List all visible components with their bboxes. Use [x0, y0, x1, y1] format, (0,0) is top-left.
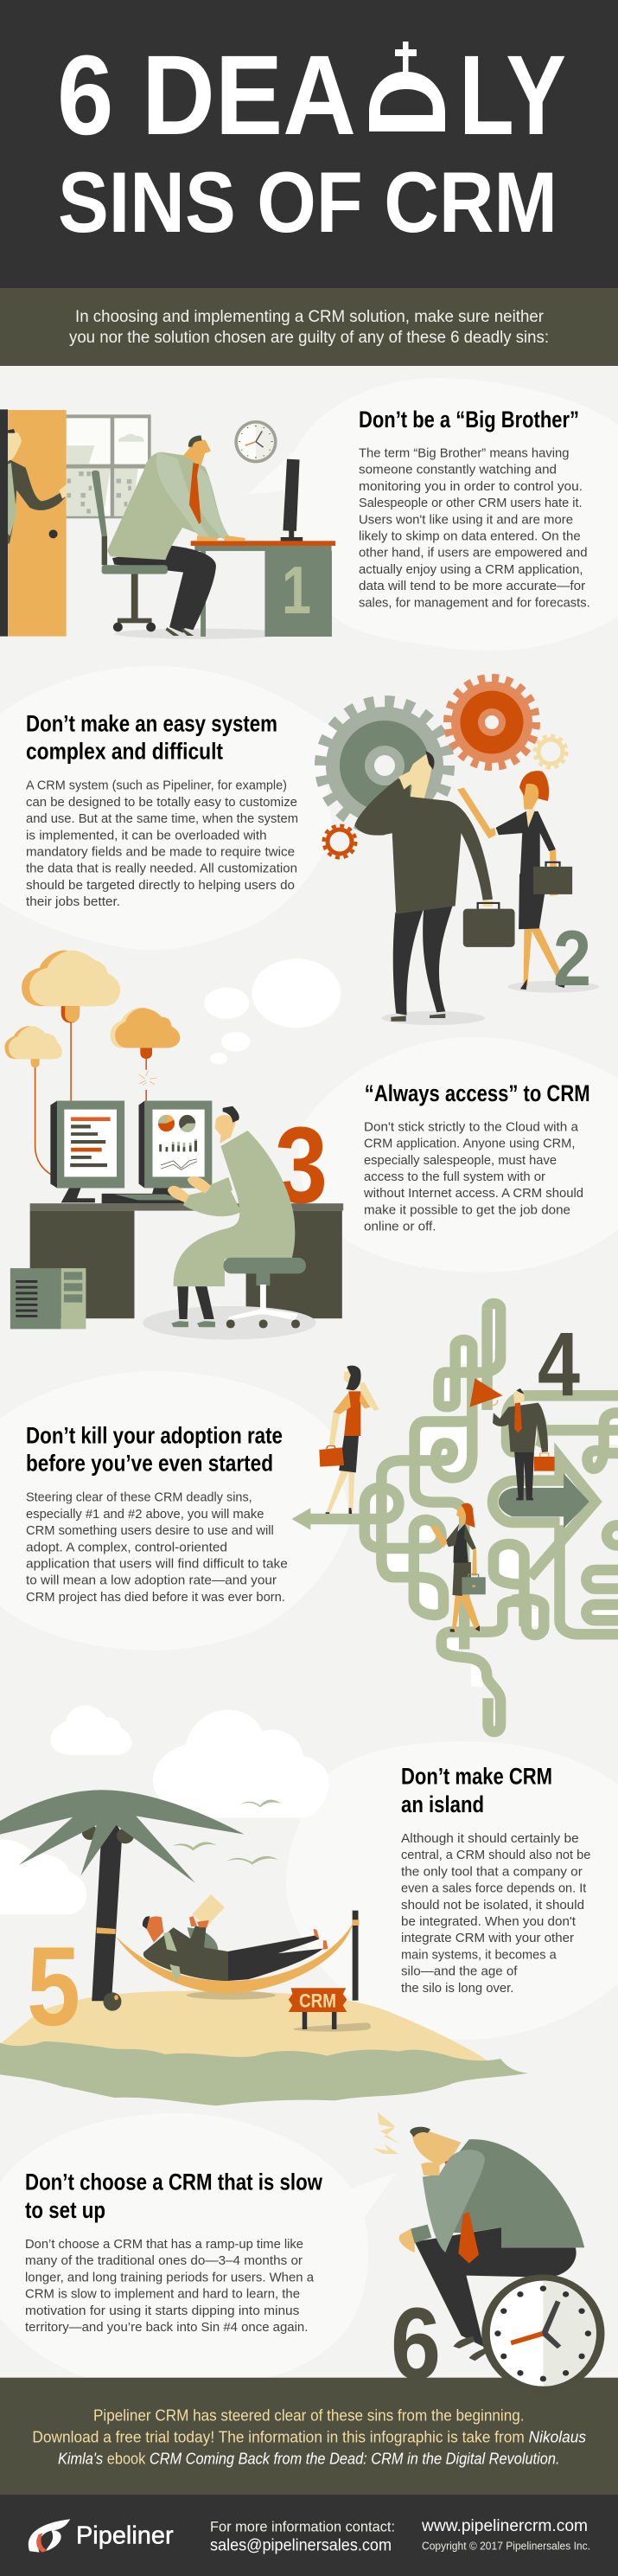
panel: sin 1 big brother: [0, 378, 618, 650]
hammock post: [353, 1911, 359, 2001]
heading 4: before you’ve even started: [26, 1451, 273, 1477]
speech blob 6: [0, 2113, 396, 2378]
body text 6: [25, 2237, 315, 2335]
cloud right: [111, 1008, 180, 1059]
intro band: In choosing and implementing a CRM solution, make sure neither: [75, 308, 545, 326]
number 6: 6: [391, 2287, 441, 2401]
seated man: [168, 1106, 295, 1327]
body text 2: mandatory fields and be made to require twice: [26, 844, 295, 860]
door with onlooker: [0, 409, 67, 637]
illustration: worried man on clock: [373, 2112, 605, 2401]
sea: [0, 2041, 528, 2105]
heading 6: to set up: [25, 2197, 105, 2223]
body text 5: the only tool that a company or: [401, 1864, 583, 1879]
desk: [30, 1203, 343, 1318]
crm sign: [289, 1988, 347, 2029]
body text 3: CRM application. Anyone using CRM,: [364, 1137, 575, 1151]
title header: [0, 0, 618, 288]
head: [412, 2129, 462, 2165]
intro band: [0, 288, 618, 366]
illustration: man and woman: [354, 751, 599, 1025]
pipes: [308, 1304, 618, 1732]
body text 3: especially salespeople, must have: [364, 1153, 557, 1168]
tie: [458, 2212, 479, 2264]
body text 3: without Internet access. A CRM should: [363, 1186, 583, 1201]
person: woman with orange bag: [319, 1366, 379, 1514]
number 2: 2: [553, 915, 591, 1003]
contact text: For more information contact:: [210, 2519, 395, 2535]
footer band: closing statement: Kimla's ebook CRM Coming Back from the Dead: CRM in the Digital Revolution.: [58, 2450, 560, 2467]
body text 3: make it possible to get the job done: [364, 1202, 570, 1217]
heading 6: Don’t choose a CRM that is slow: [25, 2169, 323, 2195]
keyboard: [102, 1194, 206, 1203]
icon: large grey gear: [321, 702, 449, 830]
arrow left: [291, 1508, 310, 1530]
panel: sin 4 adoption rate: [0, 1304, 618, 1732]
body text 2: their jobs better.: [26, 894, 120, 909]
website and copyright: www.pipelinercrm.com: [421, 2517, 588, 2535]
body text 1: [359, 446, 590, 610]
thought bubbles: [204, 958, 341, 1064]
spark: [139, 1071, 156, 1085]
illustration: tangled pipes and people: [291, 1304, 618, 1732]
body text 5: [401, 1831, 590, 1996]
body text 4: CRM something users desire to use and will: [26, 1523, 274, 1538]
contact text: sales@pipelinersales.com: [210, 2536, 392, 2554]
body text 2: should be targeted directly to helping users do: [26, 878, 295, 893]
man legs: [393, 906, 452, 1016]
floor shadow: [143, 1306, 316, 1340]
white pipe interiors: [371, 1306, 618, 1723]
panel: sin 2 complexity: [0, 666, 599, 1025]
footer band: closing statement: Download a free trial today! The information in this infographic is take from Nikolaus: [32, 2428, 586, 2445]
body text 6: longer, and long training periods for users. When a: [25, 2270, 315, 2284]
footer band: closing statement: [0, 2378, 618, 2495]
title header: SINS OF CRM: [58, 154, 557, 250]
footer contact bar: [0, 2495, 618, 2576]
panel: sin 3 always access: [4, 951, 618, 1340]
window: [67, 414, 151, 518]
body text 2: [26, 779, 298, 909]
panel: sin 6 slow setup: [0, 2113, 396, 2378]
body text 6: motivation for using it starts dipping into minus: [25, 2304, 299, 2318]
footer band: closing statement: Pipeliner CRM has steered clear of these sins from the beginning.: [93, 2406, 524, 2424]
body text 3: Don't stick strictly to the Cloud with a: [364, 1119, 579, 1134]
icon: small red gear: [323, 825, 356, 858]
chair: [92, 471, 156, 631]
illustration: man at computers: [4, 951, 343, 1340]
body text 4: [26, 1490, 288, 1605]
number 5: 5: [27, 1923, 80, 2049]
body text 3: access to the full system with or: [364, 1169, 545, 1184]
person in hammock: [116, 1894, 353, 1994]
cloud small left: [4, 1026, 62, 1067]
body text 2: A CRM system (such as Pipeliner, for example): [26, 779, 287, 793]
number 4: 4: [538, 1314, 580, 1415]
number 1: 1: [282, 552, 311, 628]
title header: D: [369, 31, 445, 158]
icon: orange gear: [448, 678, 536, 766]
body text 6: many of the traditional ones do—3–4 months or: [25, 2253, 303, 2268]
floor shadows: [381, 981, 599, 1025]
body text 4: to will mean a low adoption rate—and your: [26, 1573, 277, 1588]
crm sign label: CRM: [299, 1990, 336, 2012]
speech blob 5: [286, 1741, 618, 2040]
body text 2: and use. But at the same time, when the system: [26, 811, 298, 826]
speech blob 1: [247, 378, 618, 650]
heading 5: Don’t make CRM: [401, 1764, 552, 1790]
body text 6: Don’t choose a CRM that has a ramp-up time like: [25, 2237, 303, 2252]
lightning: [373, 2112, 400, 2154]
number 3: 3: [275, 1105, 328, 1226]
shadows: [187, 1991, 371, 2032]
body text 4: especially #1 and #2 above, you will make: [26, 1507, 264, 1522]
floor shadow: [114, 629, 288, 639]
body text 3: [363, 1119, 583, 1234]
body text 5: central, a CRM should also not be: [401, 1848, 590, 1862]
title header: LY: [459, 31, 566, 158]
intro band: you nor the solution chosen are guilty of any of these 6 deadly sins:: [69, 329, 549, 347]
speech blob 4: [0, 1371, 351, 1650]
pc tower: [10, 1268, 86, 1329]
body text 1: Users won't like using it and are more: [359, 512, 573, 527]
man briefcase: [463, 903, 515, 947]
body text 5: integrate CRM with your other: [401, 1931, 574, 1945]
speech blob 3: [299, 1037, 618, 1272]
palm tree: [0, 1790, 245, 2011]
body text 5: even a sales force depends on. It: [401, 1881, 587, 1896]
sleeve: [423, 2150, 485, 2252]
sky clouds: [0, 1706, 329, 1914]
heading 4: [26, 1422, 283, 1477]
title header: 6 DEA: [57, 31, 356, 158]
person: man with megaphone: [470, 1378, 555, 1500]
birds: [173, 1800, 281, 1865]
coat: [434, 2139, 584, 2247]
body text 2: can be designed to be totally easy to customize: [26, 795, 297, 810]
speech blob 2: [0, 666, 339, 950]
cloud large: [22, 951, 120, 1023]
icon: small cream gear: [534, 735, 567, 768]
stool: [226, 1272, 300, 1329]
woman: [457, 771, 572, 990]
heading 6: [25, 2169, 323, 2223]
body text 5: the silo is long over.: [401, 1981, 513, 1996]
body text 1: data will tend to be more accurate—for: [359, 579, 585, 593]
body text 4: application that users will find difficult to take: [26, 1557, 288, 1571]
body text 5: main systems, it becomes a: [401, 1947, 557, 1962]
body text 6: territory—and you’re back into Sin #4 once again.: [25, 2320, 308, 2335]
icon: tombstone letter D: [369, 42, 445, 131]
island: [0, 1991, 488, 2070]
heading 5: an island: [401, 1791, 484, 1817]
heading 2: complex and difficult: [26, 739, 223, 765]
body text 4: CRM project has died before it was ever born.: [26, 1590, 285, 1605]
body text 6: CRM is slow to implement and hard to learn, the: [25, 2287, 300, 2302]
illustration: office scene: [0, 409, 335, 639]
shoes: [453, 2336, 487, 2361]
panel: sin 5 island: [0, 1706, 618, 2105]
body text 5: should not be isolated, it should: [401, 1898, 584, 1913]
seated man: [102, 435, 245, 636]
body text 1: other hand, if users are empowered and: [359, 546, 588, 561]
body text 1: monitoring you in order to control you.: [359, 479, 583, 494]
contact text: [210, 2519, 395, 2554]
desk: [194, 546, 332, 637]
illustration: man in hammock on island: [0, 1706, 528, 2105]
body text 2: the data that is really needed. All customization: [26, 862, 297, 876]
footer contact bar: Pipeliner: [76, 2522, 174, 2550]
man head: [406, 753, 433, 800]
body text 1: likely to skimp on data entered. On the: [359, 529, 581, 543]
body text 5: be integrated. When you don't: [401, 1914, 577, 1929]
pants: [415, 2227, 577, 2347]
body text 5: Although it should certainly be: [401, 1831, 579, 1846]
body text 1: sales, for management and for forecasts.: [359, 595, 590, 610]
clock: [481, 2274, 605, 2393]
monitor right with charts: [139, 1100, 212, 1195]
monitor left: [50, 1100, 124, 1202]
body text 4: Steering clear of these CRM deadly sins,: [26, 1490, 252, 1505]
man torso: [354, 779, 493, 914]
heading 4: Don’t kill your adoption rate: [26, 1422, 283, 1448]
body text 1: someone constantly watching and: [359, 463, 557, 477]
body text 1: The term “Big Brother” means having: [359, 446, 569, 460]
person: woman with red hair: [430, 1503, 486, 1632]
body text 4: adopt. A complex, control-oriented: [26, 1540, 227, 1554]
heading 2: Don’t make an easy system: [26, 711, 277, 737]
heading 5: [401, 1764, 552, 1817]
body text 1: actually enjoy using a CRM application,: [359, 562, 583, 577]
logo: pipeliner: [29, 2519, 70, 2553]
body text 5: silo—and the age of: [401, 1964, 518, 1979]
wall clock: [234, 420, 277, 463]
hands: [399, 2163, 439, 2252]
monitor: [281, 459, 303, 542]
body text 3: online or off.: [364, 1220, 436, 1234]
heading 2: [26, 711, 277, 765]
arrow right: [499, 1473, 589, 1528]
body text 2: is implemented, it can be overloaded with: [26, 828, 267, 843]
cable lines: [35, 1021, 146, 1175]
website and copyright: Copyright © 2017 Pipelinersales Inc.: [422, 2540, 590, 2553]
body text 1: Salespeople or other CRM users hate it.: [359, 496, 583, 510]
website and copyright: [421, 2517, 590, 2553]
